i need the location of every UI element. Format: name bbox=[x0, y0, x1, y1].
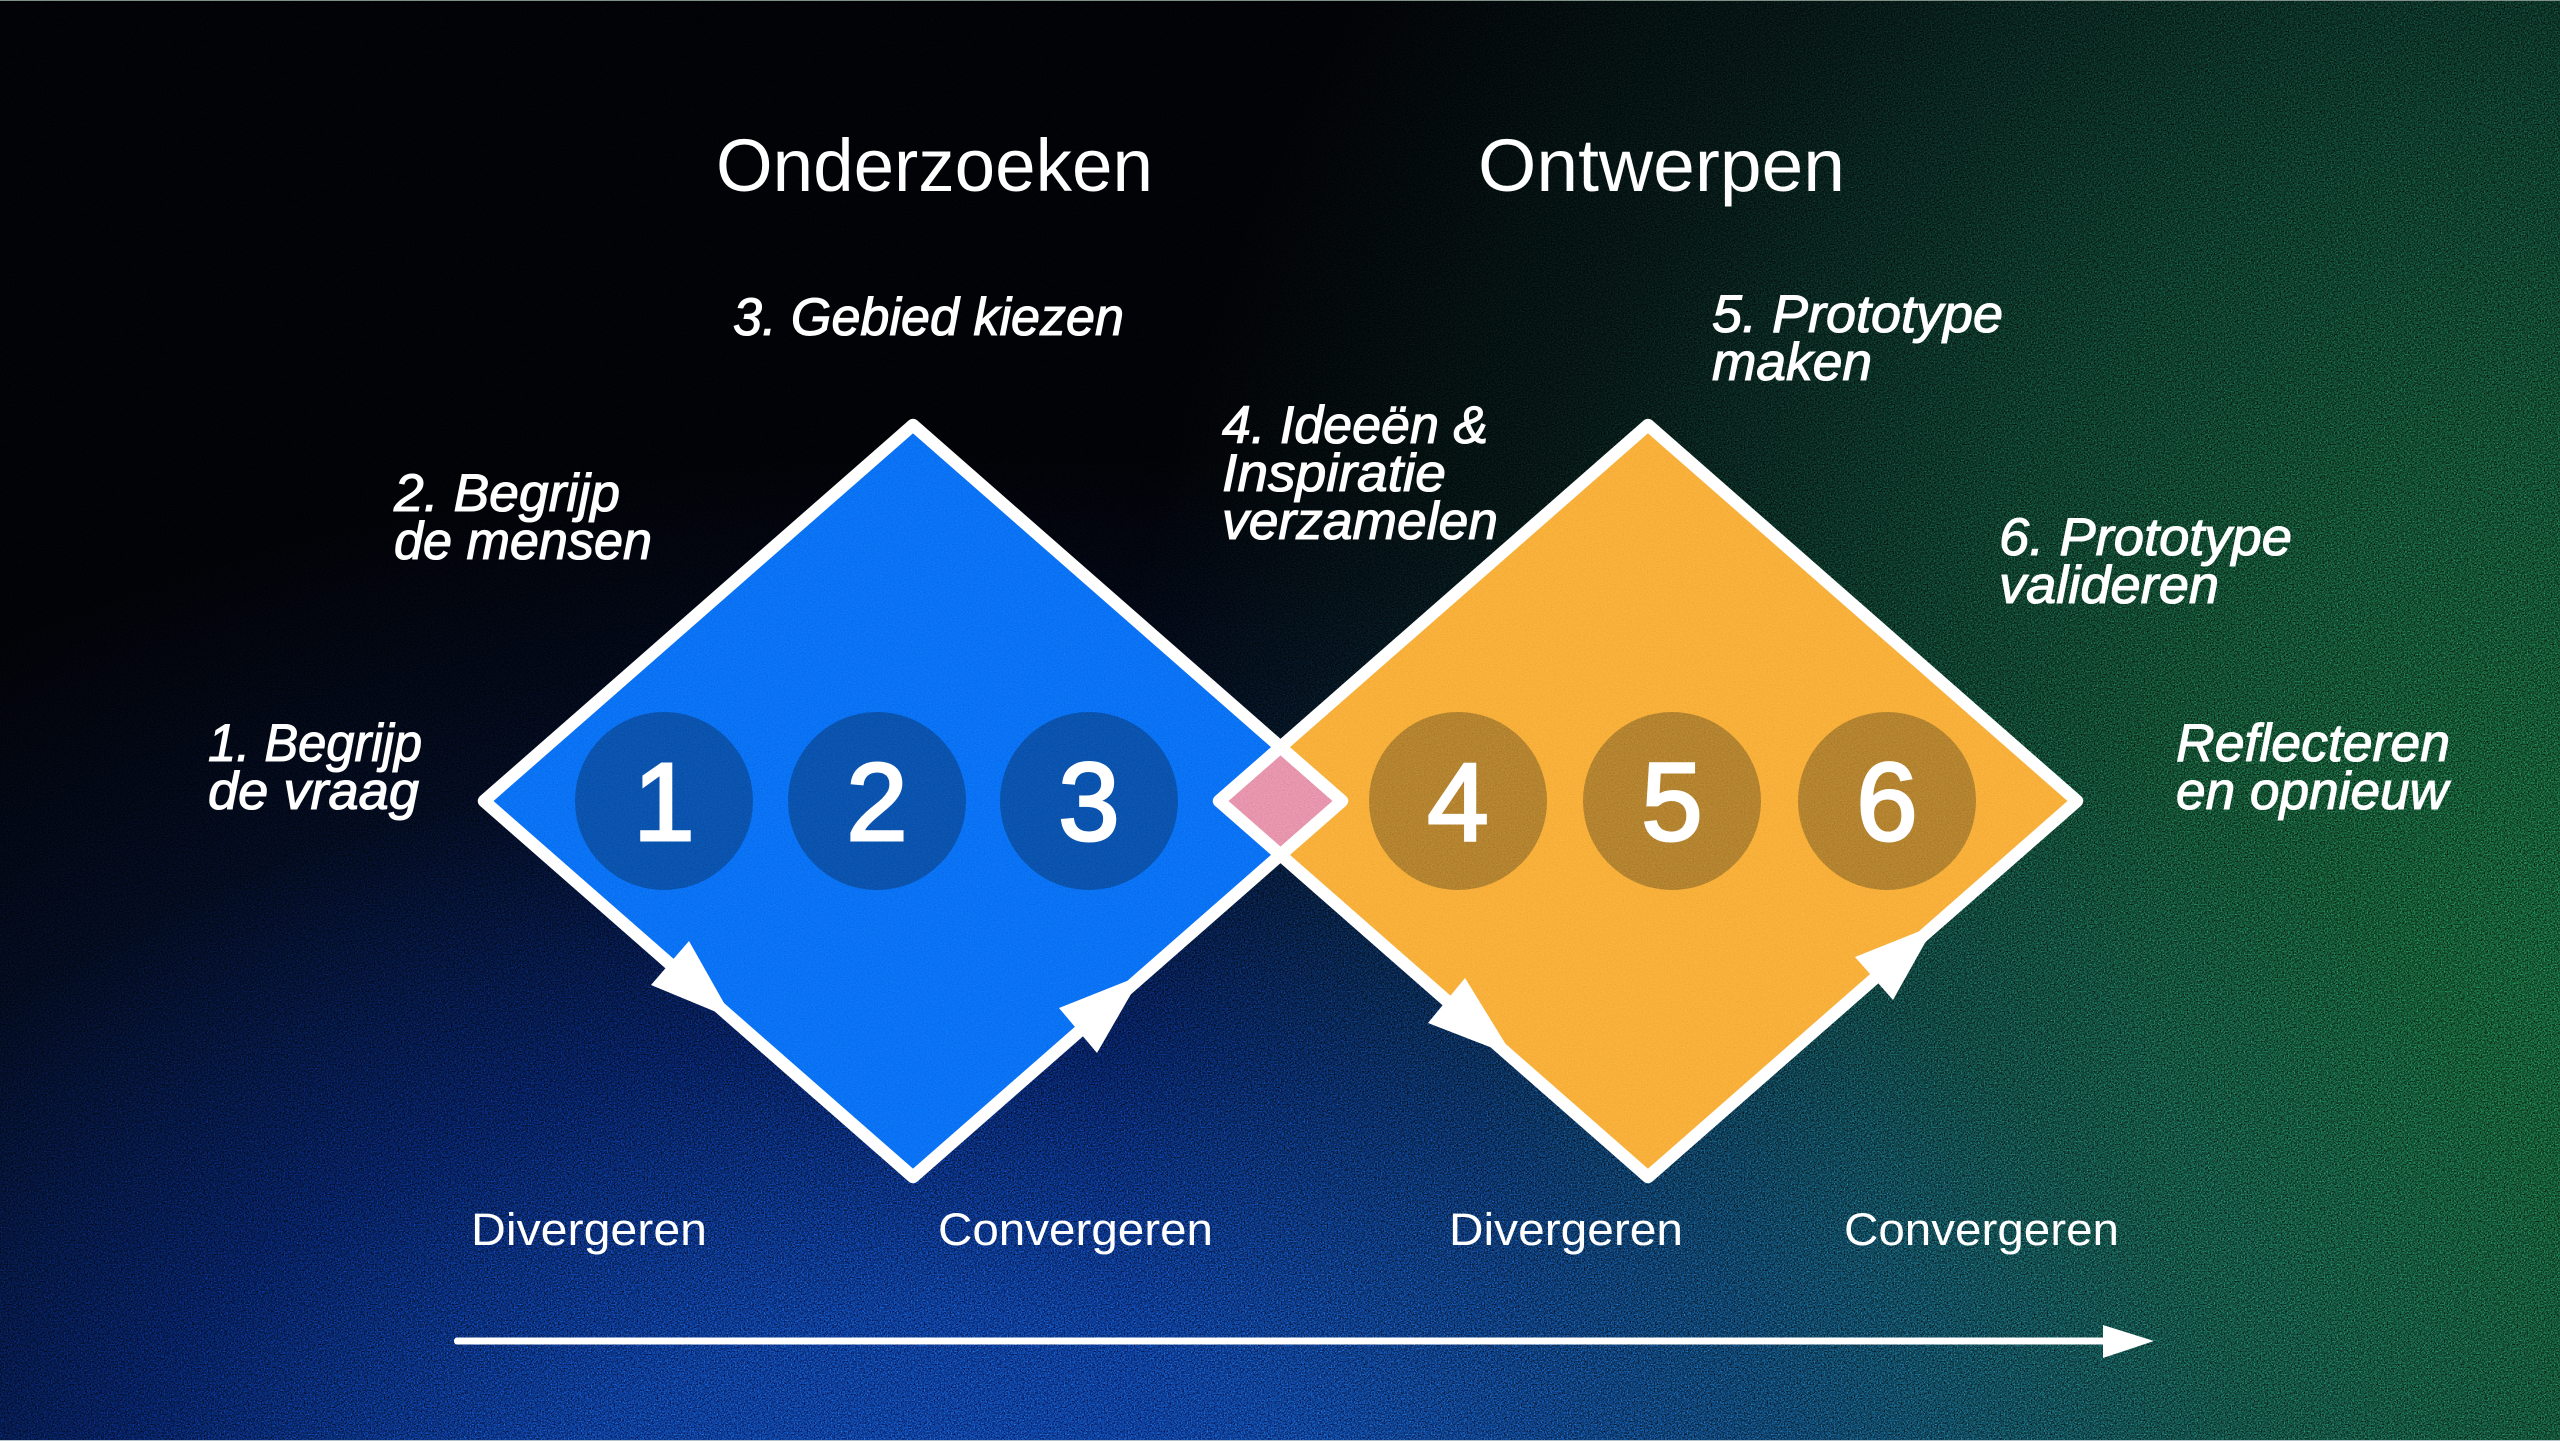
label: reflect and repeat bbox=[2176, 714, 2452, 821]
label: step 6: valideren bbox=[1999, 556, 2219, 615]
label: step 2 bbox=[393, 464, 652, 571]
label: step 4 bbox=[1222, 396, 1498, 551]
label: step 4: verzamelen bbox=[1222, 492, 1498, 551]
numbered circles: steps 1 to 3: 3 bbox=[1058, 741, 1120, 864]
numbered circles: steps 4 to 6 bbox=[1369, 712, 1976, 890]
label: step 5: 5. Prototype bbox=[1712, 285, 2003, 344]
panel: blue diamond (Onderzoeken) bbox=[484, 425, 1342, 1177]
arrow: orange diamond converging bbox=[1855, 925, 1935, 1000]
label: step 6 bbox=[1999, 508, 2292, 615]
label: step 5: maken bbox=[1712, 333, 1872, 392]
panel: pink overlap diamond bbox=[1219, 748, 1342, 855]
label: reflect and repeat: en opnieuw bbox=[2176, 762, 2452, 821]
numbered circles: steps 4 to 6: 5 bbox=[1641, 741, 1703, 864]
label: step 1: 1. Begrijp bbox=[208, 714, 422, 773]
label: step 4: Inspiratie bbox=[1222, 444, 1446, 503]
numbered circles: steps 1 to 3: 2 bbox=[846, 741, 908, 864]
numbered circles: steps 1 to 3: 1 bbox=[633, 741, 695, 864]
heading: Ontwerpen: Ontwerpen bbox=[1478, 124, 1845, 207]
diamond outlines bbox=[484, 425, 2077, 1177]
label: reflect and repeat: Reflecteren bbox=[2176, 714, 2450, 773]
label: Convergeren right: Convergeren bbox=[1844, 1204, 2119, 1255]
label: step 2: 2. Begrijp bbox=[393, 464, 620, 523]
arrow: blue diamond converging bbox=[1059, 975, 1142, 1053]
label: step 6: 6. Prototype bbox=[1999, 508, 2292, 567]
label: step 1 bbox=[208, 714, 422, 821]
label: Divergeren right: Divergeren bbox=[1449, 1204, 1683, 1255]
arrow: timeline bbox=[454, 1325, 2154, 1358]
label: Convergeren left: Convergeren bbox=[938, 1204, 1213, 1255]
label: step 1: de vraag bbox=[208, 762, 420, 821]
heading: Onderzoeken: Onderzoeken bbox=[716, 124, 1153, 207]
numbered circles: steps 4 to 6: 6 bbox=[1856, 741, 1918, 864]
numbered circles: steps 4 to 6: 4 bbox=[1427, 741, 1489, 864]
label: step 2: de mensen bbox=[394, 512, 652, 571]
arrow: orange diamond diverging bbox=[1428, 978, 1513, 1056]
label: step 3: 3. Gebied kiezen bbox=[733, 288, 1124, 347]
label: step 4: 4. Ideeën & bbox=[1222, 396, 1488, 455]
label: step 5 bbox=[1712, 285, 2003, 392]
panel: orange diamond (Ontwerpen) bbox=[1219, 425, 2077, 1177]
label: Divergeren left: Divergeren bbox=[471, 1204, 707, 1255]
arrow: blue diamond diverging bbox=[651, 941, 733, 1019]
numbered circles: steps 1 to 3 bbox=[575, 712, 1178, 890]
